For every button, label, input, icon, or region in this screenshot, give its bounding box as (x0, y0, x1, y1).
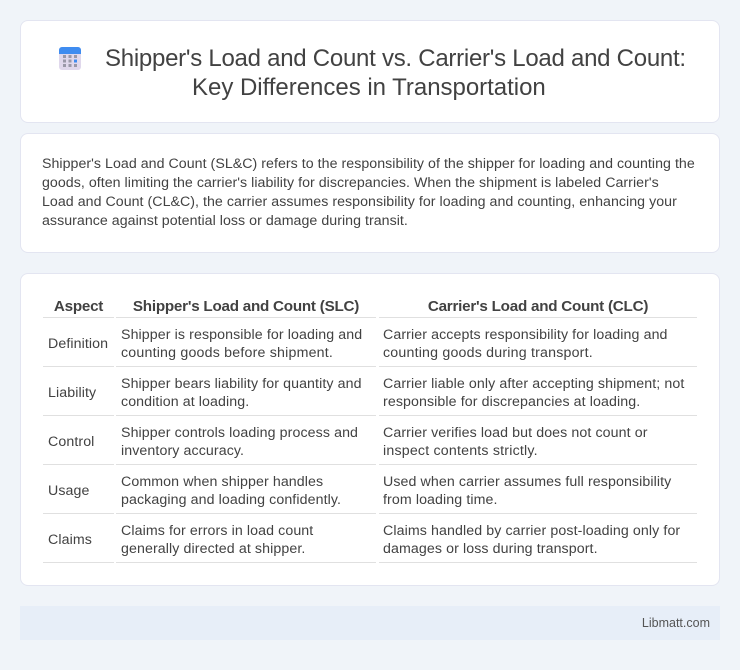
text block: introduction: Load and Count (CL&C), the carrier assumes responsibility for loading and counting, enhancing your (42, 194, 677, 210)
row: definition: counting goods before shipment. (121, 345, 333, 361)
row: definition: Shipper is responsible for loading and (121, 327, 362, 343)
row: liability: Liability (48, 385, 96, 401)
row: usage (48, 474, 672, 508)
heading: Key Differences in Transportation (192, 74, 546, 101)
panel: comparison table (20, 273, 720, 586)
row: liability: Shipper bears liability for quantity and (121, 376, 362, 392)
panel: introduction (20, 133, 720, 253)
row: usage: Usage (48, 483, 90, 499)
row: claims: generally directed at shipper. (121, 541, 305, 557)
text block: introduction: goods, often limiting the carrier's liability for discrepancies. When the shipment is labeled Carrier's (42, 175, 659, 191)
row: claims: damages or loss during transport. (383, 541, 598, 557)
table header (54, 298, 648, 315)
heading: Shipper's Load and Count vs. Carrier's Load and Count: (105, 45, 686, 72)
row: liability: Carrier liable only after accepting shipment; not (383, 376, 684, 392)
row: definition: Carrier accepts responsibility for loading and (383, 327, 668, 343)
row: control: Shipper controls loading process and (121, 425, 358, 441)
row: definition (48, 327, 668, 361)
row: definition: Definition (48, 336, 108, 352)
row: liability (48, 376, 684, 410)
row: definition: counting goods during transport. (383, 345, 593, 361)
row: claims: Claims (48, 532, 92, 548)
row: usage: packaging and loading confidently. (121, 492, 341, 508)
table header: Aspect (54, 298, 103, 315)
footer (20, 606, 720, 640)
text block: introduction: Shipper's Load and Count (SL&C) refers to the responsibility of the shipper for loading and counting the (42, 156, 695, 172)
row: usage: from loading time. (383, 492, 498, 508)
row: claims: Claims handled by carrier post-loading only for (383, 523, 680, 539)
row: liability: responsible for discrepancies at loading. (383, 394, 640, 410)
icon: calendar (59, 47, 81, 70)
table header: Carrier's Load and Count (CLC) (428, 298, 648, 315)
row: control: inventory accuracy. (121, 443, 244, 459)
footer text: Libmatt.com (642, 616, 710, 630)
row: claims: Claims for errors in load count (121, 523, 313, 539)
table header: Shipper's Load and Count (SLC) (133, 298, 359, 315)
row: claims (48, 523, 680, 557)
text block: introduction: assurance against potential loss or damage during transit. (42, 213, 408, 229)
panel: title card (20, 20, 720, 123)
row: control (48, 425, 648, 459)
row: usage: Used when carrier assumes full responsibility (383, 474, 671, 490)
text block: introduction (42, 156, 695, 229)
row: liability: condition at loading. (121, 394, 249, 410)
row: usage: Common when shipper handles (121, 474, 323, 490)
row: control: Control (48, 434, 94, 450)
row: control: Carrier verifies load but does not count or (383, 425, 648, 441)
heading (105, 45, 686, 101)
row: control: inspect contents strictly. (383, 443, 538, 459)
